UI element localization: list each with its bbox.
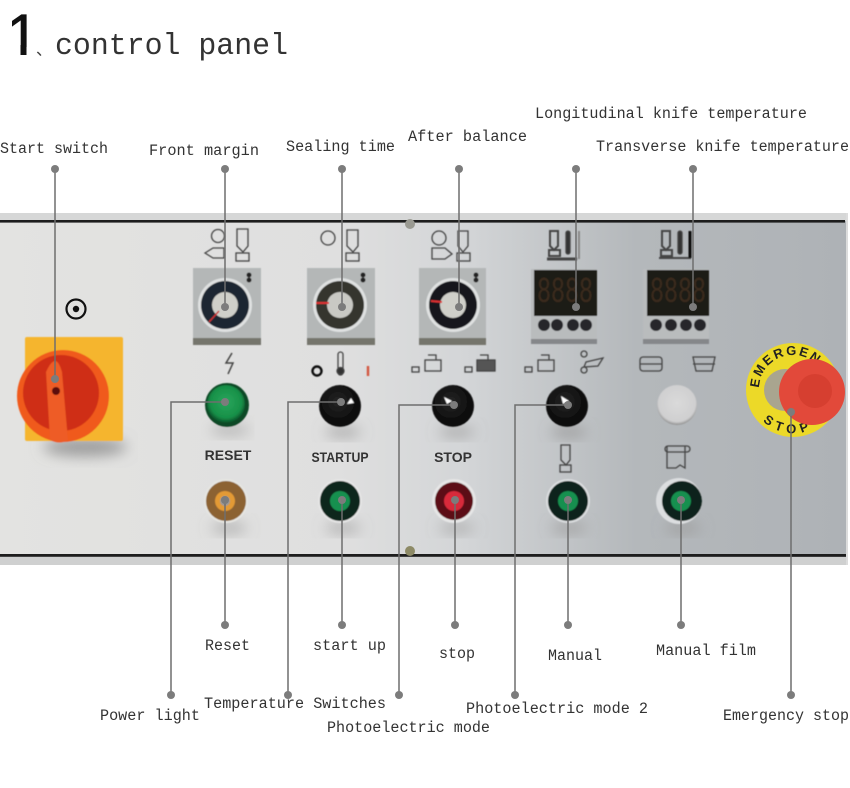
emergency stop button	[746, 343, 845, 437]
knobs	[319, 385, 588, 437]
temperature displays	[531, 269, 709, 344]
title	[12, 14, 286, 60]
panel labels: STARTUP	[312, 449, 368, 465]
start switch	[17, 337, 127, 456]
white blank button	[657, 385, 697, 425]
callout text labels: Manual	[548, 647, 602, 665]
callout text labels: Longitudinal knife temperature	[535, 105, 807, 123]
callout text labels: start up	[313, 637, 386, 655]
power light	[205, 383, 250, 435]
title: 1	[6, 3, 39, 68]
temperature displays: 8888	[650, 272, 706, 313]
timers	[193, 268, 486, 345]
callout text labels: Photoelectric mode 2	[466, 700, 648, 718]
panel: control panel plate	[0, 213, 848, 565]
callout text labels: Power light	[100, 707, 200, 725]
callout text labels: Front margin	[149, 142, 259, 160]
panel labels: STOP	[434, 449, 472, 465]
temperature displays: 8888	[537, 272, 593, 313]
icons: function symbols	[205, 229, 715, 472]
icon: target symbol	[66, 300, 86, 318]
callout text labels: After balance	[408, 128, 527, 146]
callout text labels: Transverse knife temperature	[596, 138, 849, 156]
title: control panel	[55, 29, 288, 64]
callout text labels: Reset	[205, 637, 250, 655]
callout text labels: Temperature Switches	[204, 695, 386, 713]
title: 、	[36, 42, 52, 59]
callout text labels: Photoelectric mode	[327, 719, 490, 737]
callout text labels: Emergency stop	[723, 707, 849, 725]
callout text labels: Start switch	[0, 140, 108, 158]
push buttons	[204, 478, 702, 533]
emergency stop button: EMERGENCY	[750, 346, 821, 388]
callout lines and dots	[51, 165, 795, 699]
callout text labels: stop	[439, 645, 475, 663]
callout text labels: Manual film	[656, 642, 756, 660]
panel labels	[205, 447, 472, 465]
emergency stop button: STOP	[764, 416, 808, 434]
panel labels: RESET	[205, 447, 252, 463]
callout text labels: Sealing time	[286, 138, 395, 156]
